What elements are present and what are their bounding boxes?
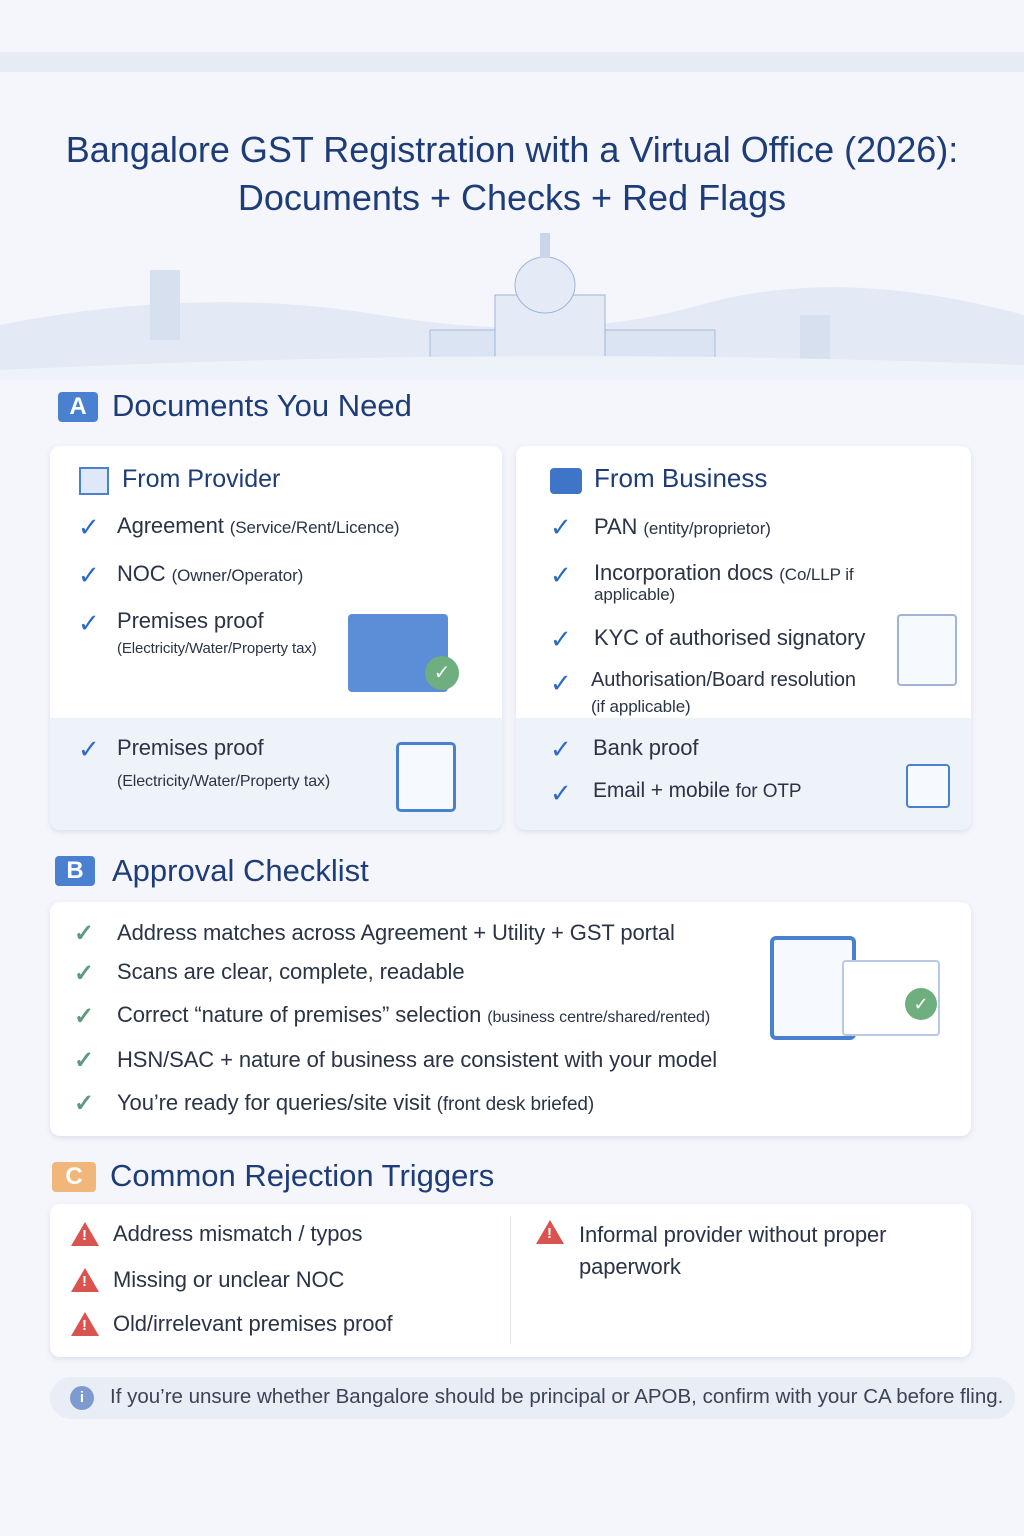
panel: from provider: NOC (Owner/Operator) — [117, 561, 303, 586]
panel: from business: ✓ — [550, 778, 572, 808]
panel: from provider: Agreement (Service/Rent/Licence) — [117, 513, 400, 538]
panel: from provider: ✓ — [434, 662, 450, 684]
panel: from provider: ✓ — [78, 560, 100, 590]
panel: from provider: Premises proof — [117, 735, 264, 760]
panel: approval checklist: ✓ — [74, 1047, 94, 1074]
panel: approval checklist: ✓ — [74, 1003, 94, 1030]
icon: ID card — [897, 614, 957, 686]
footer note — [50, 1377, 1015, 1419]
panel: approval checklist: Scans are clear, complete, readable — [117, 959, 464, 984]
panel: from business: Incorporation docs (Co/LLP if — [594, 560, 854, 585]
panel: from business: ✓ — [550, 668, 572, 698]
title: Bangalore GST Registration with a Virtual Office (2026): — [66, 129, 958, 170]
panel: rejection triggers: ! — [82, 1273, 87, 1290]
icon: clipboard — [396, 742, 456, 812]
panel: from provider: ✓ — [78, 608, 100, 638]
title — [66, 129, 958, 218]
panel: from provider: (Electricity/Water/Property tax) — [117, 773, 330, 790]
section C heading: C — [65, 1163, 83, 1190]
footer note: If you’re unsure whether Bangalore should be principal or APOB, confirm with your CA before fling. — [110, 1385, 1003, 1408]
panel: rejection triggers: Informal provider without proper — [579, 1222, 886, 1247]
panel: rejection triggers: Old/irrelevant premises proof — [113, 1311, 393, 1336]
icon: info: i — [80, 1389, 84, 1406]
panel: rejection triggers: Address mismatch / typos — [113, 1221, 362, 1246]
panel: approval checklist: ✓ — [74, 920, 94, 947]
section A heading: A — [69, 393, 87, 420]
icon: info — [70, 1386, 94, 1410]
panel: rejection triggers: ! — [82, 1227, 87, 1244]
panel: from business: Email + mobile for OTP — [593, 779, 801, 802]
section A heading: Documents You Need — [112, 388, 412, 423]
skyline illustration — [0, 233, 1024, 370]
panel: from business: ✓ — [550, 624, 572, 654]
panel: from business: Bank proof — [593, 735, 698, 760]
section C heading: Common Rejection Triggers — [110, 1158, 494, 1193]
panel: from business: PAN (entity/proprietor) — [594, 514, 771, 539]
panel: rejection triggers: ! — [82, 1317, 87, 1334]
panel: from business: KYC of authorised signatory — [594, 625, 865, 650]
panel: from provider: ✓ — [78, 512, 100, 542]
panel: approval checklist: ✓ — [913, 994, 929, 1014]
panel: from business: (if applicable) — [591, 697, 691, 716]
panel: approval checklist: ✓ — [74, 1090, 94, 1117]
icon: document — [79, 467, 109, 495]
panel: from provider: From Provider — [122, 465, 280, 493]
panel: from provider: ✓ — [78, 734, 100, 764]
section B heading: B — [66, 857, 84, 884]
panel: from provider: (Electricity/Water/Property tax) — [117, 640, 317, 657]
panel: from provider: Premises proof — [117, 608, 264, 633]
panel: approval checklist: ✓ — [74, 960, 94, 987]
panel: from business: applicable) — [594, 585, 675, 604]
icon: briefcase — [550, 468, 582, 494]
icon: folder — [348, 614, 448, 692]
panel: approval checklist: Address matches across Agreement + Utility + GST portal — [117, 920, 675, 945]
panel: from business: ✓ — [550, 560, 572, 590]
title: Documents + Checks + Red Flags — [238, 177, 786, 218]
panel: rejection triggers — [50, 1204, 971, 1357]
panel: from provider — [50, 446, 502, 830]
top band — [0, 52, 1024, 72]
panel: approval checklist: Correct “nature of premises” selection (business centre/shared/rented) — [117, 1002, 710, 1027]
icon: checklist clipboard — [770, 936, 856, 1040]
panel: from business: Authorisation/Board resolution — [591, 669, 856, 691]
panel: from business: ✓ — [550, 512, 572, 542]
panel: rejection triggers: Missing or unclear NOC — [113, 1267, 344, 1292]
panel: approval checklist: You’re ready for queries/site visit (front desk briefed) — [117, 1090, 594, 1115]
panel: rejection triggers: paperwork — [579, 1254, 681, 1279]
panel: from business: ✓ — [550, 734, 572, 764]
panel: from business: From Business — [594, 463, 767, 493]
panel: rejection triggers: ! — [547, 1225, 552, 1242]
panel: approval checklist — [50, 902, 971, 1136]
panel: approval checklist: HSN/SAC + nature of business are consistent with your model — [117, 1047, 717, 1072]
icon: envelope — [906, 764, 950, 808]
section B heading: Approval Checklist — [112, 853, 369, 888]
panel: from business — [516, 446, 971, 830]
